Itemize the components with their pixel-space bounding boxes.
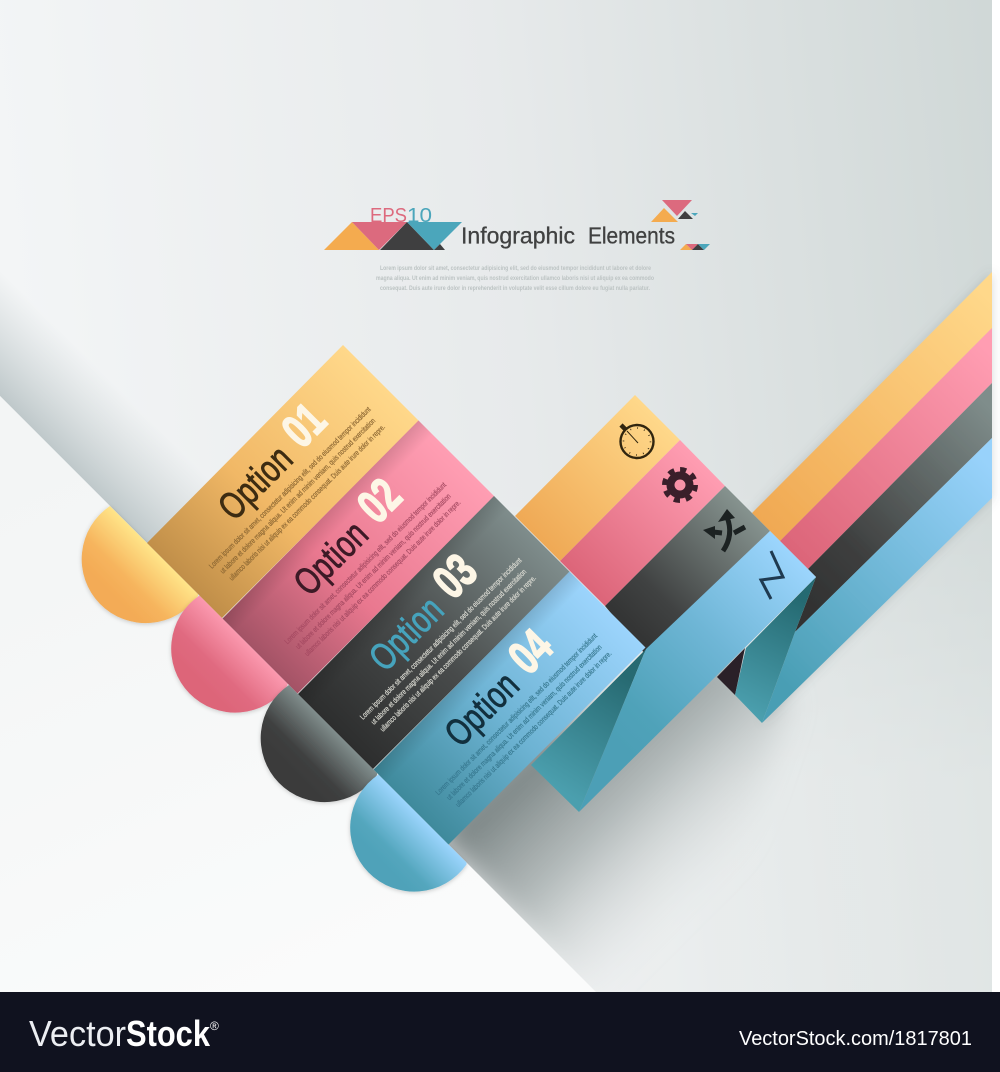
heading: option 03: Option: [362, 589, 452, 679]
panel: option 02: [222, 420, 494, 694]
shadow above diagonal fold: [0, 270, 230, 566]
number: 02: 02: [348, 469, 412, 533]
body text: option 04: ullamco laboris nisi ut aliquip ex ea commodo consequat. Duis aute irure dolor in repre.: [454, 649, 613, 809]
panel: option 01: [147, 345, 419, 618]
number: 03: 03: [423, 544, 488, 609]
subtitle text: consequat. Duis aute irure dolor in reprehenderit in voluptate velit esse cillum dolore eu fugiat nulla pariatur.: [380, 285, 650, 292]
decorative triangles: bottom right: [680, 244, 710, 250]
stripe: dark grey: [795, 383, 992, 632]
label: EPS10: EPS: [370, 204, 407, 227]
stripe: orange: [752, 272, 992, 541]
subtitle text: [376, 265, 654, 292]
icon: gear: [664, 470, 696, 500]
decorative triangles: top right: [651, 200, 698, 222]
body text: option 04: [434, 631, 613, 809]
footer logo: VectorStock: Stock: [126, 1013, 211, 1054]
heading: option 02: Option: [286, 513, 377, 604]
body text: option 03: ullamco laboris nisi ut aliquip ex ea commodo consequat. Duis aute irure dolor in repre.: [378, 574, 538, 733]
body text: option 01: ullamco laboris nisi ut aliquip ex ea commodo consequat. Duis aute irure dolor in repre.: [227, 423, 387, 582]
body text: option 03: [358, 555, 538, 733]
icon: stopwatch: [620, 425, 654, 458]
body text: option 02: ullamco laboris nisi ut aliquip ex ea commodo consequat. Duis aute irure dolor in repre.: [303, 498, 462, 658]
second fold: teal panel: [735, 577, 816, 723]
body text: option 04: ut labore et dolore magna aliqua. Ut enim ad minim veniam, quis nostrud exercitation: [445, 643, 604, 802]
title: Elements: [588, 222, 675, 248]
logo mark: EPS10 triangles: [324, 222, 462, 250]
half circle: orange: [82, 506, 198, 623]
subtitle text: magna aliqua. Ut enim ad minim veniam, quis nostrud exercitation ullamco laboris nisi ut aliquip ex ea commodo: [376, 275, 654, 282]
half circle: blue: [350, 774, 466, 892]
half circle: pink: [171, 596, 288, 713]
footer bar: [0, 992, 1000, 1072]
stripe: pink: [780, 328, 992, 569]
panel: option 04: [374, 572, 646, 844]
icon: diverging arrows: [703, 509, 745, 551]
number: 01: 01: [272, 393, 337, 458]
footer logo: VectorStock: [29, 1013, 219, 1054]
icon: zigzag: [761, 551, 783, 599]
heading: option 04: Option: [437, 664, 528, 755]
first fold: dark teal panel: [531, 649, 646, 812]
second fold: dark underside: [717, 648, 745, 695]
body text: option 02: Lorem ipsum dolor sit amet, consectetur adipisicing elit, sed do eiusmod tempor incididunt: [283, 480, 448, 646]
footer logo: VectorStock: ®: [210, 1019, 219, 1033]
title: [461, 222, 675, 248]
icon band: pink: [560, 440, 725, 606]
panel: option 03: [298, 496, 570, 769]
body text: option 02: [283, 480, 462, 658]
subtitle text: Lorem ipsum dolor sit amet, consectetur adipisicing elit, sed do eiusmod tempor incididunt ut labore et dolore: [380, 265, 651, 272]
half circle: dark grey: [261, 685, 377, 802]
icon band: dark grey: [605, 486, 770, 660]
shadow under folded ribbon: [430, 650, 790, 1000]
white diagonal panel: [0, 396, 596, 992]
title: Infographic: [461, 222, 575, 248]
right ribbon stripes: [752, 272, 992, 723]
label: EPS10: [370, 204, 432, 227]
body text: option 03: Lorem ipsum dolor sit amet, consectetur adipisicing elit, sed do eiusmod tempor incididunt: [358, 555, 524, 721]
body text: option 03: ut labore et dolore magna aliqua. Ut enim ad minim veniam, quis nostrud exercitation: [369, 567, 528, 726]
footer image id: VectorStock.com/1817801: [739, 1027, 972, 1050]
body text: option 01: [207, 404, 387, 582]
icon band: orange: [515, 395, 680, 561]
footer logo: VectorStock: Vector: [29, 1013, 126, 1054]
stripe: blue: [762, 438, 992, 723]
label: EPS10: 10: [407, 204, 432, 227]
icon band: blue ribbon: [579, 531, 816, 812]
body text: option 01: ut labore et dolore magna aliqua. Ut enim ad minim veniam, quis nostrud exercitation: [218, 416, 377, 575]
body text: option 02: ut labore et dolore magna aliqua. Ut enim ad minim veniam, quis nostrud exercitation: [294, 492, 453, 651]
body text: option 04: Lorem ipsum dolor sit amet, consectetur adipisicing elit, sed do eiusmod tempor incididunt: [434, 631, 599, 797]
number: 04: 04: [499, 620, 563, 684]
heading: option 01: Option: [211, 438, 301, 528]
body text: option 01: Lorem ipsum dolor sit amet, consectetur adipisicing elit, sed do eiusmod tempor incididunt: [207, 404, 373, 570]
